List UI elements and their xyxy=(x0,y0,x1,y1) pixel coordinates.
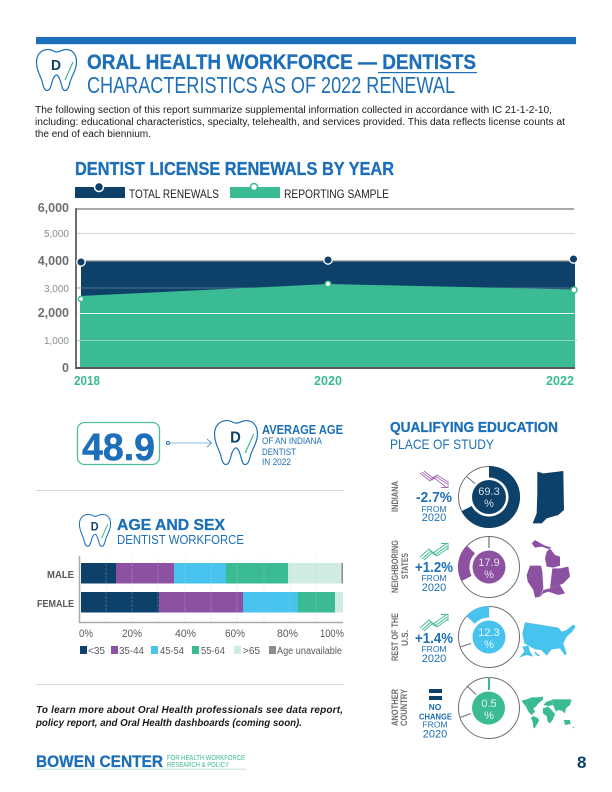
row label xyxy=(390,689,409,726)
bars: female xyxy=(81,592,343,612)
icon: up trend arrow xyxy=(420,614,448,631)
row: another country: 2020 xyxy=(423,728,447,740)
row: another country: CHANGE xyxy=(419,712,452,722)
percent axis labels: 40% xyxy=(175,628,196,640)
map: Indiana xyxy=(533,471,564,523)
bar legend: <35 xyxy=(88,646,105,657)
intro paragraph xyxy=(35,105,565,140)
heading: age and sex: DENTIST WORKFORCE xyxy=(117,532,244,547)
row label xyxy=(390,540,410,593)
arrow xyxy=(166,439,212,447)
heading: age and sex: AGE AND SEX xyxy=(117,517,226,534)
y axis labels: 0 xyxy=(62,361,69,375)
heading: qualifying education: PLACE OF STUDY xyxy=(390,436,495,452)
category labels: MALE xyxy=(47,569,74,581)
change stat: -2.7% xyxy=(416,489,452,506)
percent axis labels: 0% xyxy=(79,628,93,640)
map: United States xyxy=(519,622,576,658)
row label: REST OF THE xyxy=(390,613,400,661)
bar legend: 35-44 xyxy=(119,646,144,657)
page number: 8 xyxy=(577,753,586,772)
chart legend: TOTAL RENEWALS xyxy=(129,187,219,201)
footer logo: Bowen Center: RESEARCH & POLICY xyxy=(167,762,229,769)
callout: average age: IN 2022 xyxy=(262,457,291,468)
chart legend xyxy=(75,182,389,201)
heading: age and sex xyxy=(117,517,244,547)
bar legend: Age unavailable xyxy=(277,646,342,657)
title: ORAL HEALTH WORKFORCE — DENTISTS xyxy=(87,51,476,74)
note: learn more: To learn more about Oral Health professionals see data report, xyxy=(36,705,343,716)
icon: tooth with D xyxy=(215,421,257,465)
y axis labels: 6,000 xyxy=(38,201,69,215)
callout: average age: AVERAGE AGE xyxy=(262,423,343,437)
bars: male xyxy=(81,563,343,584)
percent axis labels: 80% xyxy=(277,628,298,640)
category labels: FEMALE xyxy=(37,598,74,610)
y axis labels: 2,000 xyxy=(38,306,69,320)
chart legend: REPORTING SAMPLE xyxy=(284,187,389,201)
intro paragraph: The following section of this report summarize supplemental information collected in accordance with IC 21-1-2-10, xyxy=(35,105,552,116)
intro paragraph: including: educational characteristics, specialty, telehealth, and services provided. This data reflects license counts at xyxy=(35,117,565,128)
y axis labels: 4,000 xyxy=(38,254,69,268)
row label: U.S. xyxy=(400,630,410,646)
bar legend: >65 xyxy=(243,646,260,657)
bar legend: 45-54 xyxy=(160,646,184,657)
heading: qualifying education: QUALIFYING EDUCATION xyxy=(390,419,558,436)
row: rest of the U.S.: 2020 xyxy=(422,653,446,665)
y axis labels: 5,000 xyxy=(44,229,69,240)
category labels xyxy=(37,569,74,610)
x axis labels: 2018 xyxy=(74,373,100,388)
heading: dentist license renewals by year: DENTIST LICENSE RENEWALS BY YEAR xyxy=(75,159,394,179)
note: learn more xyxy=(35,705,343,729)
donut: 69.3% xyxy=(458,466,520,528)
row: neighboring states xyxy=(390,536,570,598)
icon: equals sign xyxy=(429,689,442,700)
bar legend: 55-64 xyxy=(201,646,225,657)
stacked bar chart: age and sex xyxy=(37,556,344,657)
icon: up trend arrow xyxy=(420,544,448,560)
row: neighboring states: FROM xyxy=(421,573,447,583)
row: another country: FROM xyxy=(422,720,448,730)
change stat: +1.4% xyxy=(415,630,453,647)
x axis labels xyxy=(74,373,574,388)
donut: 12.3% xyxy=(458,606,520,668)
percent axis labels: 100% xyxy=(320,628,344,640)
callout: average age xyxy=(78,421,343,469)
change stat: +1.2% xyxy=(415,559,453,576)
title xyxy=(87,51,477,98)
icon: tooth with D: D xyxy=(230,429,241,447)
donut: 69.3%: 69.3 xyxy=(478,486,500,498)
row: Indiana: FROM xyxy=(421,504,447,514)
map: neighboring states xyxy=(527,540,570,598)
icon: tooth with D small: D xyxy=(91,520,99,533)
y axis labels: 1,000 xyxy=(44,336,69,347)
icon: down trend arrow xyxy=(420,471,448,488)
percent axis labels xyxy=(79,628,344,640)
icon: tooth with D xyxy=(36,50,76,90)
callout: average age: DENTIST xyxy=(262,447,296,458)
row label: NEIGHBORING xyxy=(390,540,400,593)
row: neighboring states: 2020 xyxy=(422,582,446,594)
note: learn more: policy report, and Oral Health dashboards (coming soon). xyxy=(35,718,302,729)
donut: 0.5% xyxy=(458,677,520,738)
heading: qualifying education xyxy=(390,419,558,452)
row label xyxy=(390,613,410,661)
icon: tooth with D small xyxy=(79,514,111,546)
row: Indiana xyxy=(390,466,564,528)
row: another country xyxy=(390,677,575,740)
x axis labels: 2022 xyxy=(546,373,574,388)
title: CHARACTERISTICS AS OF 2022 RENEWAL xyxy=(87,72,455,98)
bar legend xyxy=(80,646,342,657)
donut: 69.3%: % xyxy=(484,498,494,510)
icon: tooth with D: D xyxy=(51,57,61,74)
percent axis labels: 20% xyxy=(122,628,142,640)
intro paragraph: the end of each biennium. xyxy=(35,129,151,140)
row label: STATES xyxy=(400,553,410,579)
y axis labels: 3,000 xyxy=(44,284,69,295)
area chart: license renewals xyxy=(38,201,578,388)
row label: ANOTHER xyxy=(390,689,400,726)
row: rest of the U.S.: FROM xyxy=(421,644,447,654)
footer logo: Bowen Center: BOWEN CENTER xyxy=(36,752,163,771)
top banner bar xyxy=(36,37,576,45)
change stat: NO xyxy=(429,702,442,712)
donut: 12.3%: % xyxy=(484,639,494,651)
donut: 17.9%: 17.9 xyxy=(478,557,500,569)
donut: 0.5%: 0.5 xyxy=(481,698,497,710)
map: world xyxy=(522,697,575,729)
donut: 12.3%: 12.3 xyxy=(478,627,500,639)
row label: COUNTRY xyxy=(399,689,409,726)
percent axis labels: 60% xyxy=(225,628,245,640)
row label: INDIANA xyxy=(390,481,401,512)
y axis labels xyxy=(38,201,69,375)
donut: 17.9%: % xyxy=(484,569,494,581)
x axis labels: 2020 xyxy=(314,373,342,388)
donut: 17.9% xyxy=(458,536,520,598)
footer logo: Bowen Center: FOR HEALTH WORKFORCE xyxy=(167,755,245,762)
row: Indiana: 2020 xyxy=(422,512,446,524)
row: rest of the U.S. xyxy=(390,606,576,668)
footer logo: Bowen Center xyxy=(36,752,246,771)
callout: average age: OF AN INDIANA xyxy=(262,436,323,447)
donut: 0.5%: % xyxy=(484,710,494,722)
callout: average age: 48.9 xyxy=(82,427,155,469)
